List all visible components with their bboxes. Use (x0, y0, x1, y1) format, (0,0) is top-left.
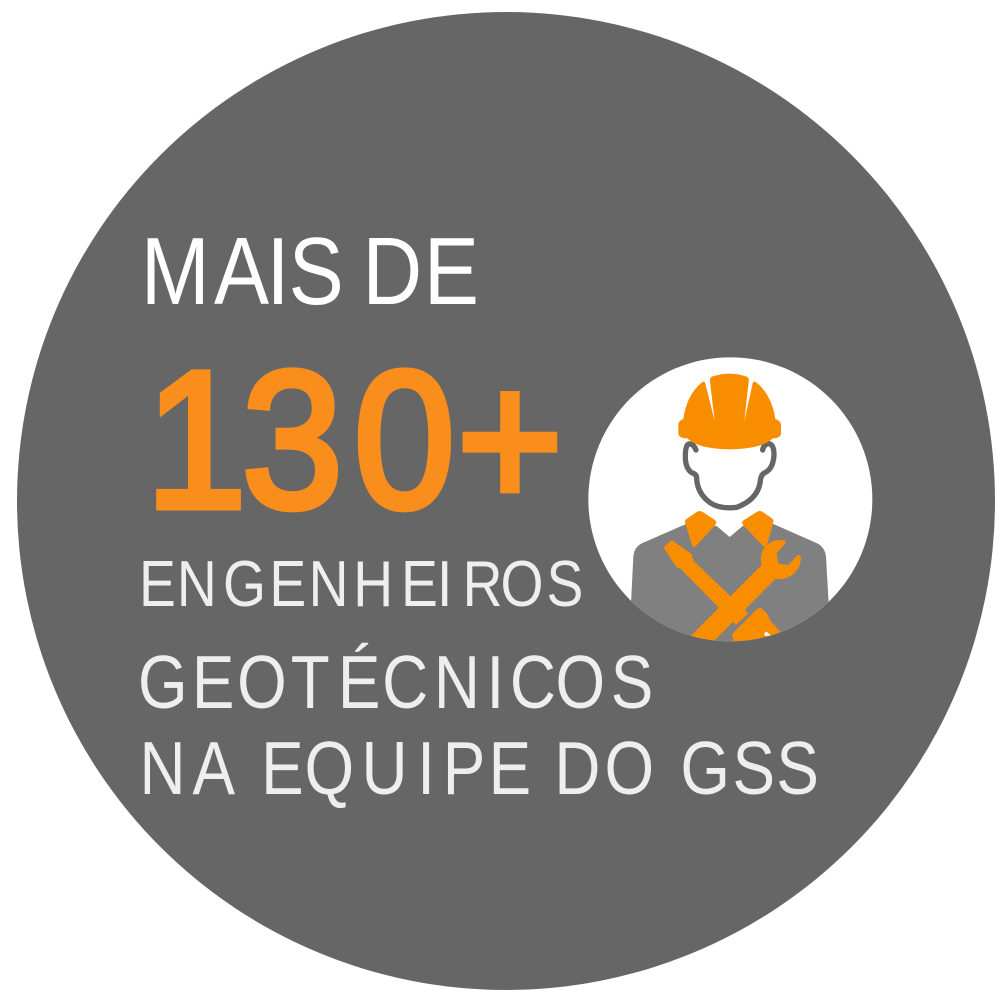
icon part: third tool (732, 608, 780, 642)
heading: mais de: MAIS DE (141, 217, 479, 324)
text line: geotécnicos: GEOTÉCNICOS (138, 640, 653, 724)
big number: 130+: 130+ (146, 331, 563, 548)
text line: na equipe do gss: NA EQUIPE DO GSS (140, 726, 819, 810)
text line: engenheiros: ENGENHEIROS (139, 547, 583, 620)
icon: engineer with helmet and tools (588, 357, 872, 650)
icon part: helmet (678, 374, 781, 449)
icon part: right collar (742, 511, 773, 547)
icon part: screwdriver (663, 540, 748, 625)
icon part: tool highlight (764, 632, 771, 636)
icon part: left collar (685, 511, 716, 547)
icon part: face outline (685, 444, 774, 508)
icon part: wrench (687, 540, 801, 643)
icon background: white circle (588, 357, 872, 641)
icon part: body and tools (631, 524, 829, 650)
